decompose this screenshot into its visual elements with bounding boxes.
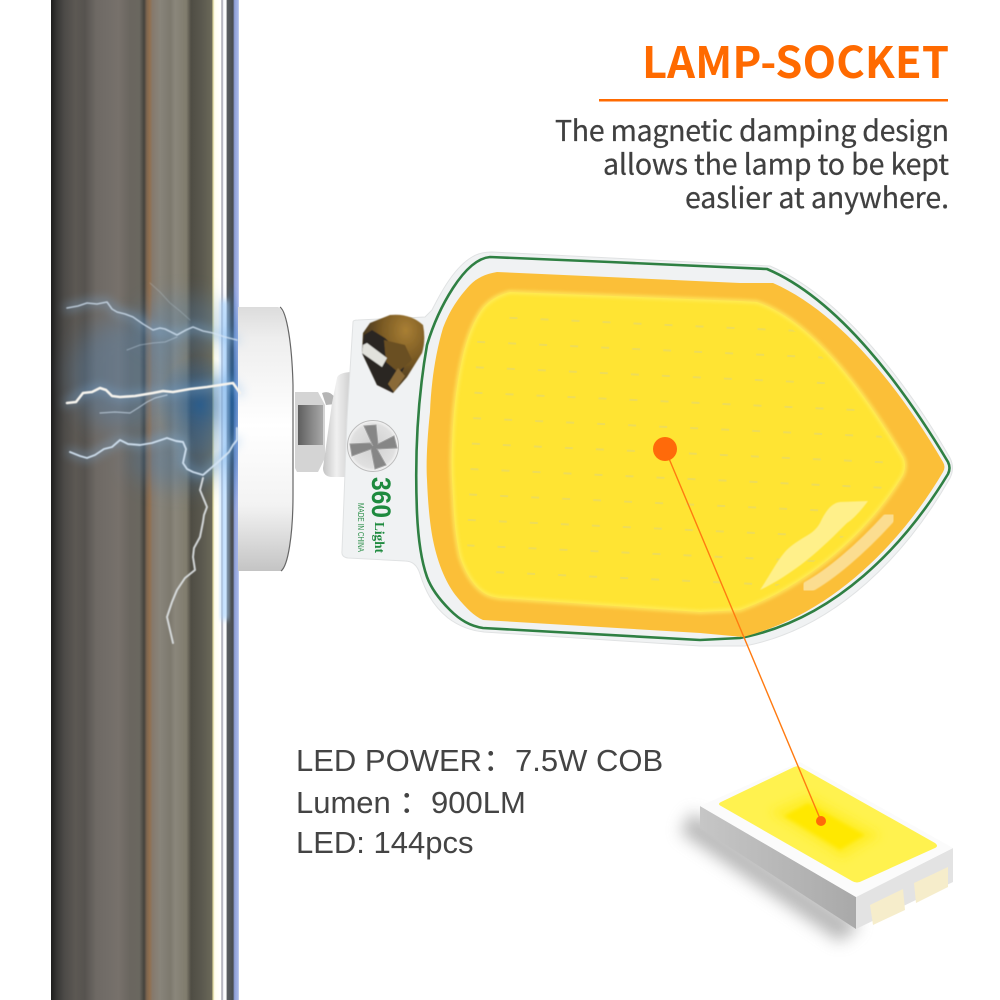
made in china mark: MADE IN CHINA bbox=[356, 503, 366, 552]
LED specifications: LED POWER bbox=[296, 743, 482, 778]
callout line and markers bbox=[653, 437, 826, 826]
chip shadow bbox=[680, 812, 860, 942]
logo 360 Light: Light bbox=[371, 522, 386, 553]
LED specifications: ： bbox=[483, 743, 514, 778]
chip left face bbox=[700, 806, 856, 929]
hex nut and washer bbox=[295, 392, 335, 472]
description text bbox=[555, 109, 949, 217]
LED specifications: Lumen bbox=[296, 785, 391, 820]
brand marks on board bbox=[356, 477, 396, 553]
LED specifications: 900LM bbox=[431, 785, 526, 820]
COB orange band bbox=[427, 272, 944, 637]
blue electric glow on pole bbox=[70, 280, 242, 620]
contact pad right bbox=[914, 867, 948, 903]
contact pad left bbox=[870, 889, 905, 925]
metal bracket bbox=[323, 372, 350, 477]
magnetic base bbox=[238, 307, 293, 571]
lightning glow bbox=[67, 302, 240, 475]
LED specifications: LED: 144pcs bbox=[296, 825, 474, 860]
LED chip illustration bbox=[680, 762, 953, 942]
description text: easlier at anywhere. bbox=[685, 176, 949, 217]
lamp board outline bbox=[342, 252, 952, 646]
title: LAMP-SOCKET bbox=[642, 28, 949, 91]
lamp highlights bbox=[760, 501, 889, 590]
lightning strands bbox=[67, 283, 240, 643]
description text: allows the lamp to be kept bbox=[603, 142, 949, 184]
chip bright center bbox=[784, 803, 865, 850]
side clip cutout bbox=[362, 315, 424, 393]
chip yellow phosphor bbox=[719, 766, 937, 882]
LED specifications bbox=[296, 743, 663, 860]
LED specifications: ： bbox=[399, 785, 430, 820]
description text: The magnetic damping design bbox=[555, 109, 949, 150]
LED dot grid bbox=[467, 316, 883, 586]
COB yellow light surface bbox=[450, 292, 910, 612]
chip top face bbox=[700, 762, 953, 897]
phillips screw bbox=[348, 420, 398, 472]
logo 360 Light bbox=[366, 477, 396, 553]
chip soft glow bbox=[770, 795, 880, 858]
lightning bolts bbox=[67, 283, 240, 643]
metal pole bbox=[51, 0, 242, 1000]
title rule bbox=[599, 99, 948, 102]
green outline trace bbox=[416, 257, 949, 640]
silver piece in cutout bbox=[362, 343, 387, 367]
logo 360 Light: 360 bbox=[366, 477, 396, 518]
chip right face bbox=[856, 848, 953, 929]
LED specifications: 7.5W COB bbox=[515, 743, 663, 778]
